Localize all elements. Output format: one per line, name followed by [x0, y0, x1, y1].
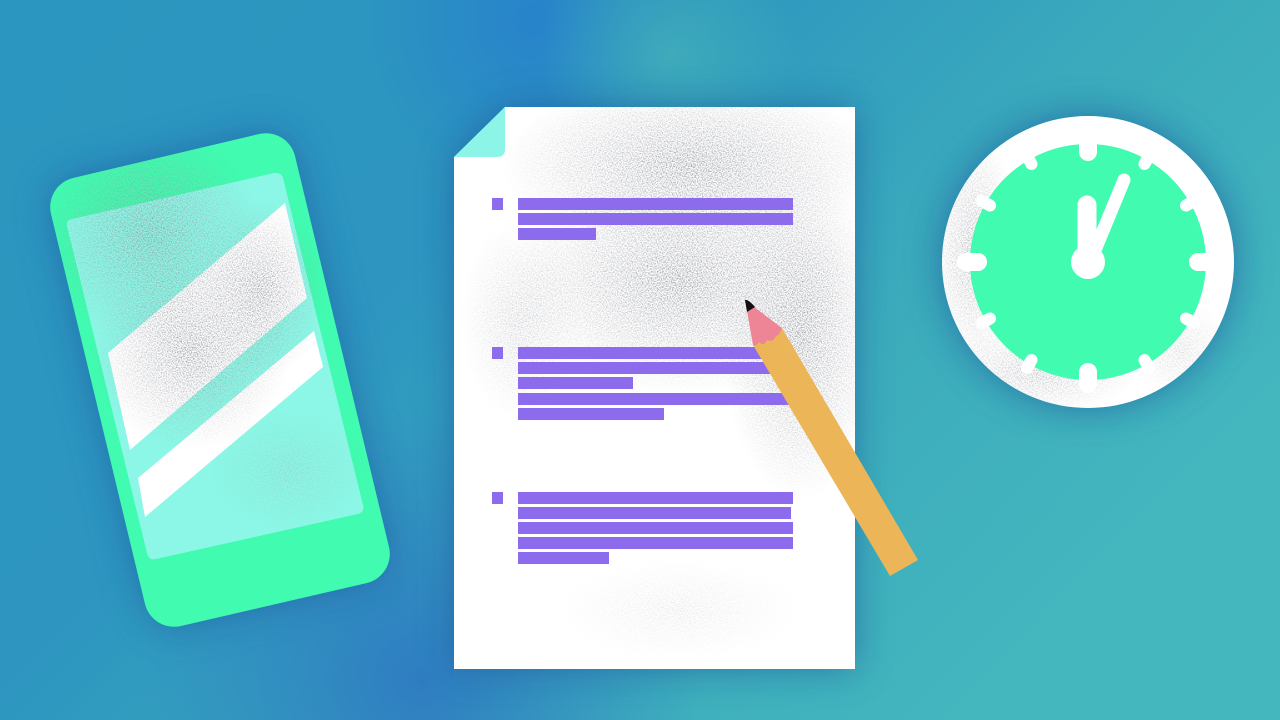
clock rim — [942, 116, 1234, 408]
clock minute hand — [1093, 180, 1124, 255]
pencil wood tip — [745, 300, 782, 345]
text block 3 — [492, 492, 793, 564]
phone — [40, 125, 390, 627]
pencil lead — [745, 300, 755, 312]
clock ticks — [966, 140, 1210, 384]
phone body — [50, 133, 390, 627]
paper sheet — [454, 107, 855, 669]
phone screen — [67, 173, 363, 559]
clock centre hub — [1071, 245, 1105, 279]
clock hour hand — [1078, 205, 1096, 262]
clock — [930, 116, 1234, 415]
clock face — [970, 144, 1206, 380]
document — [454, 80, 880, 669]
paper texture — [470, 107, 855, 644]
screen stripe: large — [108, 203, 307, 450]
screen stripe: small — [138, 331, 323, 517]
folded corner — [454, 107, 505, 157]
clock rim texture — [942, 156, 1212, 405]
phone paper texture — [52, 149, 350, 516]
text block 2 — [492, 347, 793, 420]
text block 1 — [492, 198, 793, 240]
pencil — [745, 300, 918, 576]
pencil body — [753, 328, 918, 576]
